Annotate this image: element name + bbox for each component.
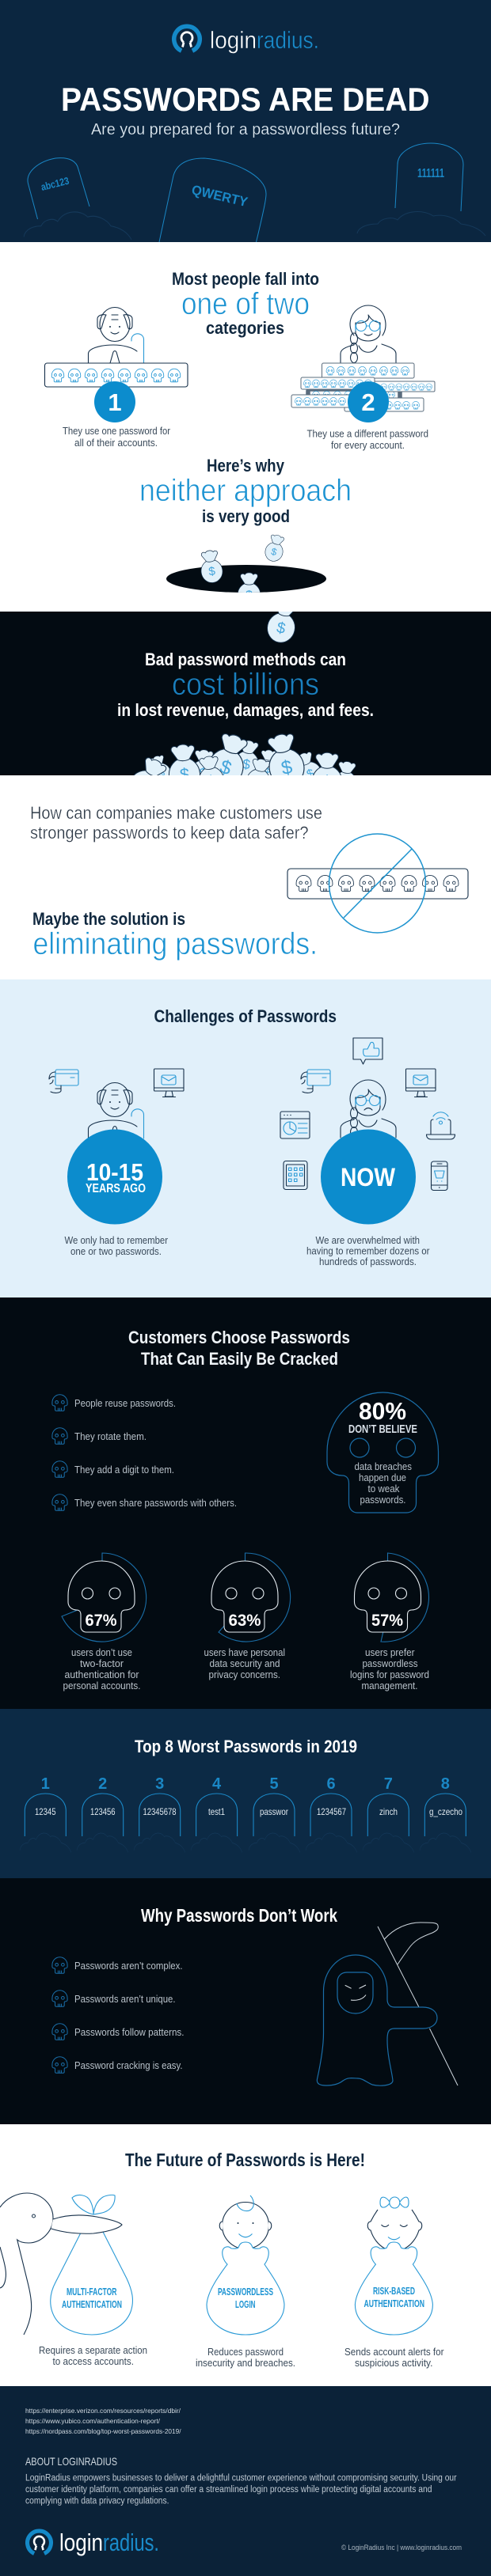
badge: 2: 2 — [361, 388, 375, 416]
stat: 63%: privacy concerns. — [209, 1669, 280, 1680]
illustration: pile of money bags: $ — [179, 764, 190, 785]
stat: 57%: 57% — [371, 1612, 403, 1630]
logo: footer — [28, 2529, 159, 2556]
gravestone: abc123: abc123 — [40, 175, 70, 193]
gravestone: 1 12345 — [20, 1775, 71, 1852]
subtitle: Are you prepared for a passwordless future? — [91, 120, 400, 138]
illustration: pile of money bags: $ — [253, 775, 263, 790]
stat: 63% — [204, 1553, 291, 1680]
heading: eliminating passwords: eliminating passwords. — [33, 927, 318, 961]
caption: passwordless: Reduces password — [207, 2346, 284, 2358]
illustration: baby with bow in risk-based bag: AUTHENTICATION — [364, 2298, 424, 2309]
list: password habits: They even share passwords with others. — [74, 1498, 237, 1509]
panel: two categories — [44, 272, 436, 593]
heading: Customers Choose Passwords — [128, 1328, 350, 1347]
caption: multi-factor: to access accounts. — [52, 2355, 134, 2367]
heading — [128, 1328, 350, 1369]
icon: email monitor (past) — [154, 1069, 184, 1097]
illustration: baby in passwordless bag: PASSWORDLESS — [218, 2286, 273, 2298]
panel: future of passwords — [0, 2124, 491, 2386]
callout: 80% skull: data breaches — [355, 1461, 412, 1472]
sources: https://nordpass.com/blog/top-worst-passwords-2019/ — [25, 2427, 181, 2435]
list: password habits: People reuse passwords. — [74, 1398, 176, 1409]
gravestone: 5 passwor: passwor — [260, 1806, 288, 1817]
illustration: pile of money bags: $ — [341, 777, 349, 791]
sources: https://enterprise.verizon.com/resources/reports/dbir/ — [25, 2407, 181, 2415]
icon: credit card in hand (now) — [301, 1070, 330, 1093]
gravestone: 7 zinch: 7 — [384, 1775, 393, 1793]
icon: falling money bag: $ — [275, 619, 287, 638]
list: reasons — [52, 1957, 184, 2073]
gravestone: 3 12345678 — [134, 1775, 185, 1852]
heading: one of two categories: Most people fall into — [172, 269, 319, 289]
badge: 1: 1 — [108, 388, 122, 416]
heading: neither approach: neither approach — [139, 474, 352, 508]
sources: https://www.yubico.com/authentication-report/ — [25, 2417, 161, 2425]
stat: 57%: passwordless — [363, 1658, 418, 1669]
illustration: pile of money bags: $ — [217, 756, 234, 780]
password fields: many passwords — [291, 363, 435, 411]
illustration: pile of money bags: $ — [265, 763, 272, 775]
illustration: pile of money bags: $ — [199, 765, 207, 781]
panel: customers choose passwords — [0, 1297, 491, 1709]
heading: one of two categories: one of two — [181, 287, 310, 321]
badge: now: NOW — [341, 1163, 396, 1191]
icon: falling money bag — [267, 612, 295, 643]
gravestone: 7 zinch — [363, 1775, 414, 1852]
illustration: baby in passwordless bag — [207, 2195, 284, 2335]
icon: laptop with wifi — [426, 1112, 455, 1139]
list: password habits — [52, 1395, 237, 1510]
gravestone: 6 1234567: 6 — [326, 1775, 336, 1793]
illustration: pile of money bags: $ — [242, 756, 252, 772]
gravestone: 2 123456 — [77, 1775, 128, 1852]
badge: now — [321, 1130, 416, 1225]
caption: one password — [63, 426, 170, 449]
icon: dashboard window — [280, 1112, 310, 1138]
badge: 2 — [348, 381, 389, 422]
illustration: pile of money bags: $ — [305, 767, 317, 782]
list: password habits: They rotate them. — [74, 1431, 147, 1442]
caption: passwordless: insecurity and breaches. — [196, 2357, 295, 2369]
stat: 57%: logins for password — [350, 1669, 429, 1680]
icon: woman with glasses — [341, 305, 396, 363]
sources — [25, 2407, 181, 2435]
heading: eliminating passwords: Maybe the solution is — [32, 909, 185, 929]
illustration: stork with multi-factor bag: MULTI-FACTOR — [67, 2286, 117, 2298]
about text: customer identity platform, companies can offer a streamlined login process while protecting digital accounts and — [25, 2485, 432, 2495]
panel: eliminating passwords — [0, 775, 491, 979]
illustration: pile of money bags: $ — [207, 771, 217, 788]
caption: one password: all of their accounts. — [74, 438, 158, 449]
gravestone: 8 g_czecho: 8 — [441, 1775, 450, 1793]
illustration: money falling into a hole: $ — [246, 588, 253, 602]
panel: challenges of passwords — [0, 979, 491, 1297]
gravestone: 4 test1 — [191, 1775, 242, 1852]
copyright: © LoginRadius Inc | www.loginradius.com — [341, 2544, 462, 2552]
gravestone: abc123 — [24, 158, 131, 240]
icon: email monitor (now) — [405, 1069, 436, 1097]
icon: credit card in hand (past) — [49, 1070, 78, 1093]
stat: 57%: users prefer — [365, 1647, 415, 1658]
caption: different passwords: for every account. — [331, 440, 405, 451]
heading: neither approach: Here’s why — [207, 456, 285, 475]
heading: bad password methods: Bad password methods can — [145, 650, 346, 669]
caption: different passwords: They use a different password — [307, 429, 428, 440]
heading: bad password methods: cost billions — [172, 668, 319, 702]
list: reasons: Passwords aren’t unique. — [74, 1994, 176, 2005]
callout: 80% skull: 80% — [359, 1397, 406, 1425]
about text: complying with data privacy regulations. — [25, 2497, 169, 2506]
stat: 57%: management. — [361, 1680, 418, 1691]
heading: neither approach — [139, 456, 352, 526]
stat: 63%: data security and — [209, 1658, 280, 1669]
logo: loginradius: login — [210, 26, 257, 54]
about heading: ABOUT LOGINRADIUS — [25, 2455, 117, 2468]
question text — [30, 803, 322, 843]
badge: 10-15 years ago: YEARS AGO — [86, 1182, 146, 1195]
gravestone: 2 123456: 123456 — [90, 1806, 116, 1817]
heading: That Can Easily Be Cracked — [141, 1349, 338, 1369]
logo: footer: radius. — [103, 2529, 159, 2556]
title: PASSWORDS ARE DEAD — [61, 81, 429, 118]
icon: tablet — [284, 1161, 307, 1190]
gravestone: 3 12345678: 3 — [155, 1775, 164, 1793]
logo: footer: login — [59, 2529, 103, 2556]
caption: different passwords — [307, 429, 428, 451]
gravestone: QWERTY — [159, 158, 266, 242]
gravestone: 8 g_czecho — [420, 1775, 471, 1852]
caption: now — [306, 1235, 429, 1267]
list: reasons: Passwords follow patterns. — [74, 2027, 184, 2038]
callout: 80% skull: to weak — [367, 1483, 400, 1494]
illustration: money falling into a hole: $ — [207, 564, 217, 578]
gravestone: 6 1234567 — [306, 1775, 357, 1852]
heading: bad password methods — [117, 650, 374, 720]
gravestone: 1 12345: 1 — [41, 1775, 50, 1793]
illustration: money falling into a hole — [166, 535, 326, 593]
caption: risk-based — [344, 2346, 444, 2369]
list: reasons: Passwords aren’t complex. — [74, 1960, 182, 1972]
list: password habits: They add a digit to them. — [74, 1464, 174, 1476]
illustration: stork with multi-factor bag: AUTHENTICATION — [62, 2299, 122, 2310]
gravestone: 6 1234567: 1234567 — [317, 1806, 346, 1817]
gravestone: 2 123456: 2 — [98, 1775, 107, 1793]
panel: footer — [0, 2386, 491, 2576]
caption: now: We are overwhelmed with — [315, 1235, 420, 1246]
stat: 67%: two-factor — [80, 1658, 124, 1669]
password field: one password — [44, 363, 188, 387]
stat: 63%: users have personal — [204, 1647, 285, 1658]
panel: why passwords don't work — [0, 1878, 491, 2124]
logo: loginradius — [174, 26, 319, 54]
caption: multi-factor — [39, 2344, 147, 2367]
gravestone: QWERTY: QWERTY — [190, 182, 249, 210]
illustration: pile of money bags — [133, 733, 356, 775]
icon: phone with cart — [431, 1161, 447, 1190]
heading: eliminating passwords — [32, 909, 318, 961]
icon: crossed-out password field — [287, 834, 468, 933]
gravestone: 8 g_czecho: g_czecho — [429, 1806, 462, 1817]
panel: cost billions — [0, 612, 491, 775]
illustration: pile of money bags: $ — [322, 773, 332, 791]
illustration: pile of money bags: $ — [135, 777, 153, 797]
caption: passwordless — [196, 2346, 295, 2369]
stat: 67% — [62, 1553, 147, 1691]
heading: The Future of Passwords is Here! — [125, 2150, 365, 2170]
badge: 10-15 years ago — [67, 1130, 162, 1225]
stat: 67%: authentication for — [65, 1669, 139, 1680]
illustration: money falling into a hole: $ — [270, 546, 278, 558]
gravestone: 4 test1: 4 — [212, 1775, 222, 1793]
callout: 80% skull: DON’T BELIEVE — [348, 1422, 417, 1436]
stat: 57% — [350, 1553, 429, 1691]
icon: man with cane — [89, 307, 144, 363]
caption: now: hundreds of passwords. — [319, 1256, 417, 1267]
heading: Top 8 Worst Passwords in 2019 — [135, 1737, 357, 1756]
illustration: pile of money bags: $ — [280, 756, 295, 779]
caption: risk-based: Sends account alerts for — [344, 2346, 444, 2358]
gravestone: 7 zinch: zinch — [379, 1806, 398, 1817]
badge: 1 — [94, 381, 135, 422]
stat: 67%: personal accounts. — [63, 1680, 141, 1691]
heading: Why Passwords Don’t Work — [141, 1905, 337, 1926]
panel: top 8 worst passwords — [0, 1709, 491, 1878]
icon: man with cane — [89, 1082, 144, 1138]
illustration: baby with bow in risk-based bag: RISK-BASED — [373, 2286, 415, 2297]
caption: past — [65, 1235, 168, 1257]
question text: How can companies make customers use — [30, 803, 322, 823]
illustration: stork with multi-factor bag — [0, 2193, 132, 2335]
illustration: baby with bow in risk-based bag — [355, 2197, 432, 2335]
illustration: baby in passwordless bag: LOGIN — [235, 2299, 255, 2310]
logo: loginradius: radius. — [257, 26, 319, 54]
callout: 80% skull: happen due — [359, 1472, 406, 1483]
caption: past: one or two passwords. — [70, 1246, 162, 1257]
caption: multi-factor: Requires a separate action — [39, 2344, 147, 2356]
heading: bad password methods: in lost revenue, damages, and fees. — [117, 700, 374, 720]
question text: stronger passwords to keep data safer? — [30, 823, 309, 843]
stat: 67%: 67% — [86, 1612, 117, 1630]
badge: 10-15 years ago: 10-15 — [86, 1158, 143, 1186]
callout: 80% skull — [327, 1392, 439, 1513]
gravestone: 5 passwor — [249, 1775, 300, 1852]
gravestone: 4 test1: test1 — [208, 1806, 225, 1817]
about text — [25, 2473, 457, 2506]
illustration: grim reaper with scythe — [317, 1923, 458, 2085]
illustration: pile of money bags: $ — [157, 767, 166, 779]
panel: header — [0, 0, 491, 242]
list: reasons: Password cracking is easy. — [74, 2060, 182, 2071]
stat: 63%: 63% — [228, 1612, 261, 1630]
caption: now: having to remember dozens or — [306, 1245, 429, 1256]
gravestone: 111111: 111111 — [417, 167, 444, 180]
icon: thumbs up bubble — [353, 1038, 383, 1064]
gravestone: 5 passwor: 5 — [269, 1775, 279, 1793]
gravestone: 3 12345678: 12345678 — [143, 1806, 177, 1817]
heading: one of two categories: categories — [206, 318, 284, 338]
heading: Challenges of Passwords — [154, 1006, 337, 1026]
heading: neither approach: is very good — [202, 506, 290, 526]
caption: one password: They use one password for — [63, 426, 170, 437]
caption: past: We only had to remember — [65, 1235, 168, 1246]
callout: 80% skull: passwords. — [360, 1494, 405, 1506]
gravestone: 1 12345: 12345 — [35, 1806, 56, 1817]
gravestone: 111111 — [357, 143, 485, 236]
caption: risk-based: suspicious activity. — [355, 2357, 432, 2369]
stat: 67%: users don’t use — [71, 1647, 132, 1658]
heading: one of two categories — [172, 269, 319, 338]
icon: worried woman — [341, 1080, 396, 1138]
